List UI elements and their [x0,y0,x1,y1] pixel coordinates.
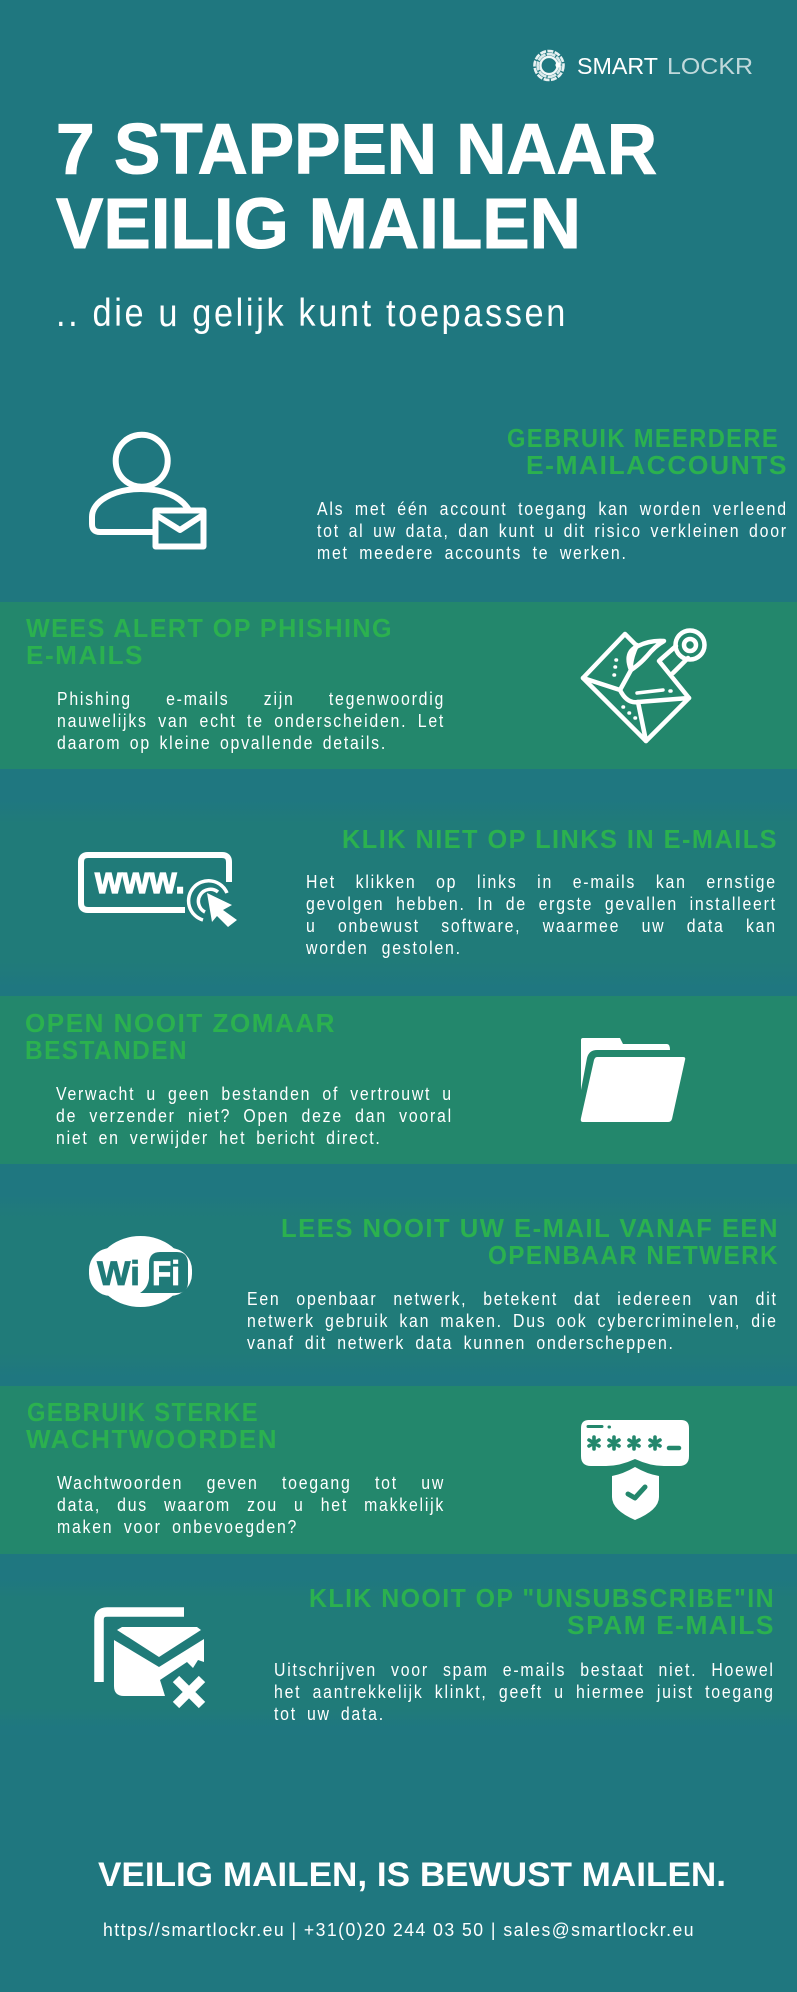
body text: step 1: Als met één account toegang kan worden verleend [317,499,788,519]
body text: step 4: niet en verwijder het bericht direct. [56,1128,382,1148]
logo: SmartLockr [534,51,753,80]
icon: wifi cloud [89,1236,192,1307]
icon: phishing envelope with hook [583,630,704,741]
title: VEILIG MAILEN [56,185,581,264]
body text: step 2: nauwelijks van echt te onderscheiden. Let [57,711,445,731]
body text: step 6: Wachtwoorden geven toegang tot uw [57,1473,445,1493]
body text: step 2: Phishing e-mails zijn tegenwoordig [57,689,445,709]
icon: person with envelope [92,435,204,546]
heading: klik nooit op unsubscribe in spam e-mails: SPAM E-MAILS [567,1610,775,1640]
body text: step 2 [57,689,445,753]
heading: wees alert op phishing e-mails [26,613,393,670]
heading: wees alert op phishing e-mails: E-MAILS [26,640,144,670]
body text: step 3: gevolgen hebben. In de ergste gevallen installeert [306,894,777,914]
heading: gebruik sterke wachtwoorden: WACHTWOORDEN [26,1424,278,1454]
icon: www link with cursor: www. [94,860,185,902]
body text: step 1: tot al uw data, dan kunt u dit risico verkleinen door [317,521,788,541]
heading: klik niet op links in e-mails: KLIK NIET OP LINKS IN E-MAILS [342,824,778,854]
heading: open nooit zomaar bestanden: BESTANDEN [25,1035,188,1065]
body text: step 3: u onbewust software, waarmee uw data kan [306,916,777,936]
body text: step 1 [317,499,788,563]
panel: step 6 wachtwoorden [0,1386,797,1554]
heading: lees nooit uw e-mail vanaf een openbaar netwerk: LEES NOOIT UW E-MAIL VANAF EEN [281,1213,779,1243]
closing statement: VEILIG MAILEN, IS BEWUST MAILEN. [98,1856,726,1894]
icon: spam envelope with cross [99,1612,204,1705]
body text: step 3: worden gestolen. [306,938,462,958]
panel: footer [0,1735,797,1992]
heading: open nooit zomaar bestanden [25,1008,336,1065]
logo wordmark: LOCKR: LOCKR [667,53,753,79]
panel: header [0,0,797,400]
panel: step 2 phishing [0,602,797,769]
panel: step 4 bestanden [0,996,797,1164]
body text: step 6: maken voor onbevoegden? [57,1517,298,1537]
heading: gebruik meerdere e-mailaccounts: GEBRUIK MEERDERE [507,423,779,453]
panel: step 3 links [0,769,797,996]
body text: step 7: tot uw data. [274,1704,385,1724]
subtitle: .. die u gelijk kunt toepassen [56,292,568,335]
icon: wifi cloud: Wi [97,1255,140,1293]
icon: wifi cloud: Fi [152,1255,180,1293]
body text: step 2: daarom op kleine opvallende details. [57,733,387,753]
icon: folder [581,1038,685,1122]
logo wordmark: SMART: SMART [577,53,658,79]
heading: gebruik sterke wachtwoorden [26,1397,278,1454]
body text: step 7 [274,1660,775,1724]
contact details: https//smartlockr.eu | +31(0)20 244 03 50 | sales@smartlockr.eu [103,1920,695,1940]
title [56,110,657,264]
heading: lees nooit uw e-mail vanaf een openbaar netwerk [281,1213,779,1270]
body text: step 3: Het klikken op links in e-mails kan ernstige [306,872,777,892]
body text: step 5 [247,1289,778,1353]
heading: klik nooit op unsubscribe in spam e-mails: KLIK NOOIT OP "UNSUBSCRIBE"IN [309,1583,775,1613]
body text: step 6: data, dus waarom zou u het makkelijk [57,1495,445,1515]
panel: step 5 openbaar netwerk [0,1164,797,1386]
body text: step 5: vanaf dit netwerk data kunnen onderscheppen. [247,1333,675,1353]
icon: password field and shield [581,1420,689,1520]
body text: step 3 [306,872,777,958]
body text: step 4 [56,1084,453,1148]
title: 7 STAPPEN NAAR [56,110,657,190]
body text: step 6 [57,1473,445,1537]
panel: step 7 unsubscribe [0,1554,797,1735]
icon: www link with cursor [81,855,237,927]
body text: step 7: Uitschrijven voor spam e-mails bestaat niet. Hoewel [274,1660,775,1680]
body text: step 5: Een openbaar netwerk, betekent dat iedereen van dit [247,1289,778,1309]
heading: gebruik meerdere e-mailaccounts: E-MAILACCOUNTS [526,450,788,480]
heading: gebruik sterke wachtwoorden: GEBRUIK STERKE [27,1397,259,1427]
heading: wees alert op phishing e-mails: WEES ALERT OP PHISHING [26,613,393,643]
body text: step 7: het aantrekkelijk klinkt, geeft u hiermee juist toegang [274,1682,775,1702]
heading: klik nooit op unsubscribe in spam e-mails [309,1583,775,1640]
body text: step 5: netwerk gebruik kan maken. Dus ook cybercriminelen, die [247,1311,778,1331]
heading: lees nooit uw e-mail vanaf een openbaar netwerk: OPENBAAR NETWERK [488,1240,779,1270]
heading: gebruik meerdere e-mailaccounts [507,423,788,480]
heading: open nooit zomaar bestanden: OPEN NOOIT ZOMAAR [25,1008,336,1038]
body text: step 1: met meedere accounts te werken. [317,543,628,563]
body text: step 4: de verzender niet? Open deze dan vooral [56,1106,453,1126]
body text: step 4: Verwacht u geen bestanden of vertrouwt u [56,1084,453,1104]
icon: logo ring [534,51,564,80]
panel: step 1 meerdere e-mailaccounts [0,400,797,602]
